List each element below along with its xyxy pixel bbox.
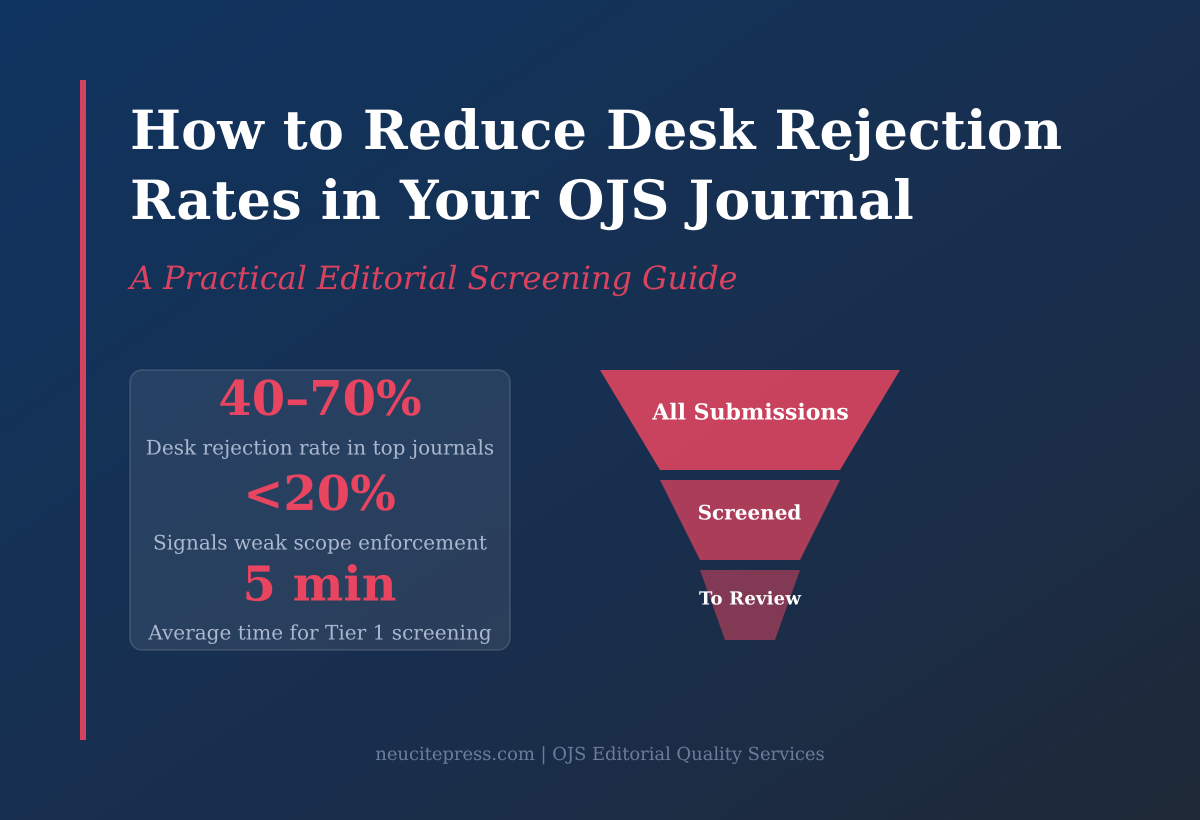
panel background xyxy=(130,370,510,650)
funnel stage: To Review xyxy=(699,570,801,640)
stat: 5 min: Average time for Tier 1 screening xyxy=(147,620,492,644)
funnel stage: Screened: Screened xyxy=(698,500,801,524)
footer: neucitepress.com | OJS Editorial Quality Services xyxy=(375,744,825,765)
stat: <20%: Signals weak scope enforcement xyxy=(153,530,487,554)
stat: <20%: <20% xyxy=(243,466,396,522)
funnel stage: To Review: To Review xyxy=(699,588,801,610)
panel: statistics xyxy=(130,370,510,650)
accent bar xyxy=(80,80,86,740)
stat: 5 min xyxy=(147,556,492,644)
stat: 40–70%: 40–70% xyxy=(218,371,422,427)
title: How to Reduce Desk Rejection xyxy=(130,98,1062,162)
funnel chart xyxy=(600,370,900,640)
stat: 40–70%: Desk rejection rate in top journals xyxy=(146,436,494,460)
stat: <20% xyxy=(153,466,487,554)
funnel stage: Screened xyxy=(660,480,840,560)
funnel stage: All Submissions xyxy=(600,370,900,470)
stat: 40–70% xyxy=(146,371,494,460)
title xyxy=(130,98,1062,232)
stat: 5 min: 5 min xyxy=(242,556,397,612)
subtitle: A Practical Editorial Screening Guide xyxy=(127,259,738,297)
title: Rates in Your OJS Journal xyxy=(130,168,914,232)
funnel stage: All Submissions: All Submissions xyxy=(651,400,849,426)
